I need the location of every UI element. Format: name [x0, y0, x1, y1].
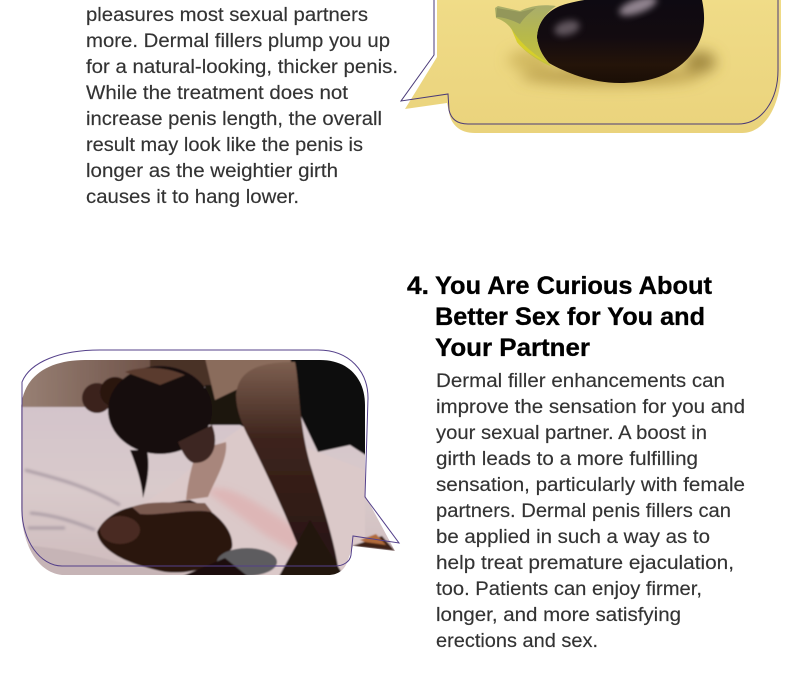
- body text: dermal filler girth paragraph: more. Dermal fillers plump you up: [86, 31, 390, 52]
- bubble outline: [401, 0, 778, 124]
- body text: reason 4 paragraph: help treat premature ejaculation,: [436, 553, 734, 574]
- heading: reason 4: Your Partner: [435, 334, 590, 362]
- body text: dermal filler girth paragraph: longer as the weightier girth: [86, 161, 338, 182]
- arm shadow at bottom: [278, 521, 342, 575]
- body text: reason 4 paragraph: partners. Dermal penis fillers can: [436, 501, 731, 522]
- body text: reason 4 paragraph: improve the sensation for you and: [436, 397, 745, 418]
- body text: reason 4 paragraph: your sexual partner. A boost in: [436, 423, 707, 444]
- body text: reason 4 paragraph: be applied in such a way as to: [436, 527, 710, 548]
- heading: reason 4: [407, 272, 713, 362]
- bubble outline: [22, 350, 399, 566]
- white shirt: [218, 520, 364, 575]
- bed sheet folds: [25, 470, 120, 530]
- eggplant shadow: [508, 50, 716, 85]
- grey hair: [217, 548, 277, 576]
- eggplant: [495, 0, 704, 83]
- woman's hair: [82, 366, 212, 498]
- speech bubble with couple photo: [15, 350, 405, 580]
- body text: dermal filler girth paragraph: causes it to hang lower.: [86, 187, 299, 208]
- body text: dermal filler girth paragraph: While the treatment does not: [86, 83, 349, 104]
- heading: reason 4: You Are Curious About: [435, 272, 713, 300]
- body text: reason 4 paragraph: [436, 371, 745, 652]
- body text: reason 4 paragraph: erections and sex.: [436, 631, 598, 652]
- body text: reason 4 paragraph: too. Patients can enjoy firmer,: [436, 579, 702, 600]
- eggplant stem: [495, 5, 556, 68]
- body text: reason 4 paragraph: longer, and more satisfying: [436, 605, 681, 626]
- body text: dermal filler girth paragraph: pleasures most sexual partners: [86, 5, 368, 26]
- body text: dermal filler girth paragraph: result may look like the penis is: [86, 135, 363, 156]
- body text: dermal filler girth paragraph: increase penis length, the overall: [86, 109, 382, 130]
- yellow bubble: [405, 0, 781, 133]
- speech bubble with eggplant photo: [401, 0, 781, 133]
- heading: reason 4: Better Sex for You and: [435, 303, 705, 331]
- heading: reason 4: 4.: [407, 272, 429, 300]
- tail detail: [352, 536, 395, 551]
- body text: reason 4 paragraph: girth leads to a more fulfilling: [436, 449, 698, 470]
- shadow behind woman's neck: [204, 384, 244, 428]
- woman's forearm: [186, 442, 226, 500]
- woman's face: [178, 425, 215, 463]
- woman's black top: [290, 360, 365, 456]
- couple photo: [15, 355, 405, 580]
- body text: dermal filler girth paragraph: for a natural-looking, thicker penis.: [86, 57, 398, 78]
- body text: reason 4 paragraph: sensation, particularly with female: [436, 475, 745, 496]
- woman's torso: [205, 358, 300, 400]
- woman's arm: [236, 362, 340, 580]
- man's head: [97, 500, 232, 573]
- body text: dermal filler girth paragraph: [86, 5, 398, 208]
- body text: reason 4 paragraph: Dermal filler enhancements can: [436, 371, 725, 392]
